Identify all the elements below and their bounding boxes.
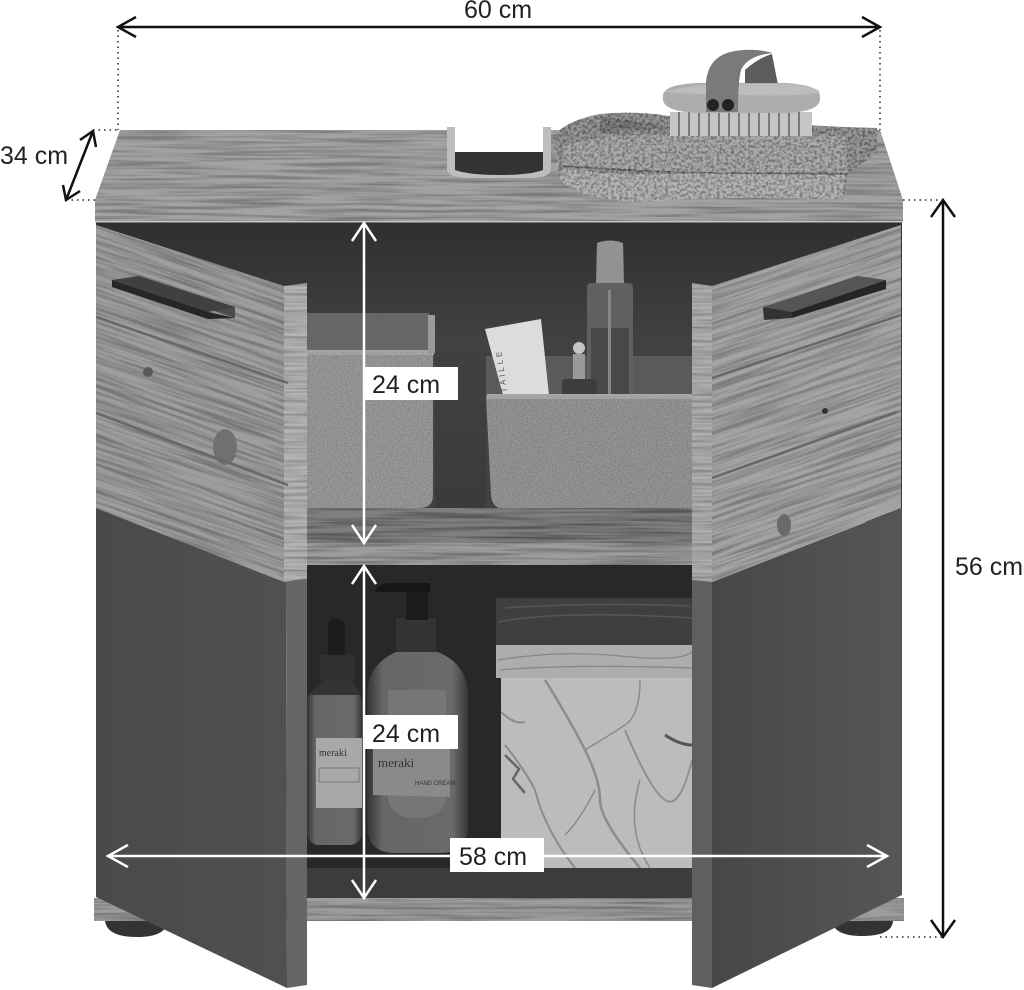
basket: left fabric basket bbox=[307, 313, 435, 508]
door edge: right lower bbox=[692, 578, 712, 988]
icon: spray bottle bbox=[587, 240, 633, 395]
icon: large pump bottle bbox=[367, 583, 468, 853]
arrow: lower 24 cm bbox=[352, 566, 458, 898]
label: large bottle: meraki bbox=[378, 755, 414, 770]
arrow: 56 cm height bbox=[931, 200, 1023, 937]
door face: left lower grey bbox=[96, 508, 287, 988]
dotted guides bbox=[66, 30, 943, 937]
icon: wooden brush with strap bbox=[663, 50, 820, 136]
icon: cream tube card bbox=[485, 319, 549, 395]
arrow: upper 24 cm bbox=[352, 223, 458, 543]
cabinet body bbox=[94, 222, 904, 937]
door edge: left wood bbox=[284, 283, 307, 582]
panel: lower compartment back bbox=[300, 565, 700, 870]
texture: right wood grain bbox=[712, 225, 901, 582]
door face: right wood bbox=[712, 225, 901, 582]
arrow: 58 cm inner width bbox=[108, 838, 887, 872]
arrow: 60 cm width bbox=[118, 0, 880, 37]
basket: right fabric basket with items bbox=[485, 240, 692, 509]
icon: right foot bbox=[832, 921, 893, 936]
icon: folded towel bbox=[550, 108, 880, 204]
arrow: 58 cm inner width: 58 cm bbox=[459, 843, 527, 871]
door face: left wood bbox=[96, 225, 284, 582]
label: large bottle bbox=[373, 749, 455, 797]
arrow: lower 24 cm: 24 cm bbox=[372, 720, 440, 748]
icon: left foot bbox=[105, 921, 168, 937]
arrow: 56 cm height: 56 cm bbox=[955, 553, 1023, 581]
bristles bbox=[670, 112, 812, 136]
icon: small serum bottle bbox=[307, 619, 362, 845]
icon: marble box bbox=[496, 598, 692, 868]
door edge: right wood bbox=[692, 283, 712, 582]
door face: right lower grey bbox=[712, 508, 902, 988]
panel: countertop bbox=[95, 127, 903, 222]
icon: right handle bbox=[763, 276, 886, 320]
door edge: left lower bbox=[286, 578, 307, 988]
icon: sink cutout bbox=[447, 127, 551, 178]
panel: left door bbox=[96, 225, 307, 988]
label: small bottle bbox=[316, 738, 362, 808]
panel: upper compartment back bbox=[96, 222, 902, 522]
texture: left wood grain bbox=[96, 225, 284, 582]
arrow: 34 cm depth: 34 cm bbox=[0, 142, 68, 170]
icon: cream tube card: TAILLE bbox=[494, 348, 509, 393]
icon: left handle bbox=[112, 276, 235, 319]
shelf: bottom shelf and plinth bbox=[94, 868, 904, 921]
arrow: 34 cm depth bbox=[0, 131, 96, 200]
label: small bottle: meraki bbox=[319, 748, 347, 759]
panel: right door bbox=[692, 225, 902, 988]
shelf: middle shelf bbox=[300, 508, 700, 565]
icon: dropper bottle small bbox=[562, 342, 597, 396]
arrow: upper 24 cm: 24 cm bbox=[372, 371, 440, 399]
label: large bottle: HAND CREAM bbox=[415, 781, 455, 787]
